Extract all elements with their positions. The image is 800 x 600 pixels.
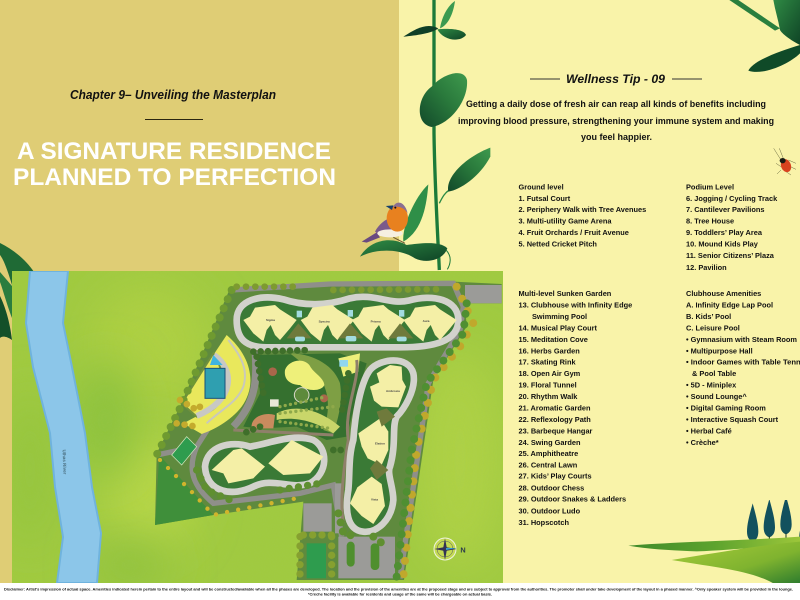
icon: ladybug [774,148,796,175]
list: clubhouse amenities: B. Kids’ Pool [686,312,731,321]
wellness tip paragraph: improving blood pressure, strengthening your immune system and making [458,115,774,126]
back hill [628,537,800,551]
list: podium level: 12. Pavilion [686,263,727,272]
lap pool [205,368,225,398]
top leaves [403,1,466,40]
list: podium level: 8. Tree House [686,216,734,226]
front hill [672,542,800,583]
list: multi-level sunken garden: 16. Herbs Garden [518,346,580,356]
central lawn [285,361,324,390]
background: left gold panel [0,0,399,583]
top right branch and leaves [729,0,800,72]
central road [233,347,256,427]
list: ground level: Ground level [518,182,564,192]
tower names: Aura [423,319,430,323]
list: multi-level sunken garden: Swimming Pool [532,312,587,321]
list: clubhouse amenities: • Crèche* [686,438,719,447]
green triangle lawn [155,455,213,525]
list: clubhouse amenities: & Pool Table [692,369,736,378]
list: multi-level sunken garden: 17. Skating Rink [518,358,576,366]
list: podium level: 10. Mound Kids Play [686,240,759,248]
list: podium level: 7. Cantilever Pavilions [686,205,764,214]
list: multi-level sunken garden: 20. Rhythm Walk [518,392,578,401]
clubhouse plot [182,353,222,417]
wellness tip paragraph: you feel happier. [581,131,652,142]
kids pool [210,355,223,365]
amphitheatre [252,414,275,428]
background: white footer strip [0,583,800,600]
clubhouse [338,353,360,377]
list: multi-level sunken garden: 15. Meditation Cove [518,335,588,344]
central garden [243,353,367,440]
robin bird [362,203,408,243]
list: clubhouse amenities: • Gymnasium with Steam Room [686,335,797,344]
tower names: Spectra [319,319,330,323]
list: multi-level sunken garden: 23. Barbeque Hangar [518,426,593,436]
hills with trees [628,496,800,583]
list: clubhouse amenities: A. Infinity Edge Lap Pool [686,300,773,310]
right residential cluster [347,360,414,532]
list: multi-level sunken garden: 22. Reflexology Path [518,415,591,424]
list: multi-level sunken garden: 25. Amphitheatre [518,449,578,458]
disclaimer: *Crèche facility is available for residents and usage of the same will be chargeable on actual basis. [308,592,492,596]
list: multi-level sunken garden: 26. Central Lawn [518,460,578,470]
list: clubhouse amenities: Clubhouse Amenities [686,289,761,298]
list: multi-level sunken garden: 31. Hopscotch [518,518,570,527]
list: clubhouse amenities: • Herbal Café [686,426,732,436]
vine with leaves [360,0,490,270]
list: multi-level sunken garden: 14. Musical Play Court [518,324,597,332]
tower names: Prisma [371,319,381,323]
grass ground [10,271,505,590]
river: Ulhas River [62,449,67,475]
list: multi-level sunken garden: Multi-level Sunken Garden [518,289,612,298]
river [26,271,101,583]
list: podium level: Podium Level [686,182,734,192]
large middle leaf [420,73,467,127]
list: ground level: 3. Multi-utility Game Arena [518,216,612,226]
road [157,283,463,578]
right residential cluster: Ambrosia [386,389,400,393]
hedges [347,542,379,570]
right residential cluster: Vista [371,498,378,502]
list: clubhouse amenities: • Interactive Squash Court [686,415,779,424]
list: multi-level sunken garden: 24. Swing Garden [518,438,581,447]
tree trunks [768,533,786,538]
list: multi-level sunken garden: 28. Outdoor Chess [518,484,584,492]
title: PLANNED TO PERFECTION [13,164,336,191]
list: podium level [686,182,778,272]
futsal court [307,543,326,578]
tower names: Sigma [266,318,275,322]
list: ground level [518,182,646,248]
list: clubhouse amenities [686,289,800,447]
compass: N [460,546,466,555]
list: clubhouse amenities: • Indoor Games with Table Tennis [686,358,800,366]
branch leaf right [439,148,490,203]
cypress trees [747,500,800,540]
disclaimer [4,588,793,596]
list: multi-level sunken garden: 19. Floral Tunnel [518,380,577,390]
tower names [266,319,430,323]
brown tracks [233,348,359,523]
list: multi-level sunken garden: 30. Outdoor Ludo [518,506,581,516]
list: podium level: 6. Jogging / Cycling Track [686,194,778,203]
masterplan map [10,271,505,590]
wellness tip paragraph [458,98,774,142]
list: ground level: 5. Netted Cricket Pitch [518,240,597,248]
wellness tip paragraph: Getting a daily dose of fresh air can reap all kinds of benefits including [466,98,766,109]
parking areas [303,285,502,578]
perch leaf [360,240,447,261]
leaf behind bird [403,184,428,242]
list: ground level: 2. Periphery Walk with Tree Avenues [518,205,646,214]
site plan [155,282,502,580]
list: clubhouse amenities: • Digital Gaming Room [686,404,766,412]
tendril [446,250,450,269]
decorative palm leaves behind map [0,243,34,340]
yellow crescent [183,335,250,434]
list: multi-level sunken garden: 27. Kids’ Play Courts [518,472,592,480]
divider under chapter label [145,119,203,120]
pools [295,310,407,341]
list: clubhouse amenities: • Multipurpose Hall [686,346,753,356]
bottom left residential cluster [205,438,324,492]
arena [172,437,197,465]
vine stem [434,0,439,270]
list: multi-level sunken garden: 21. Aromatic Garden [518,404,591,412]
list: ground level: 1. Futsal Court [518,194,571,203]
list: clubhouse amenities: • Sound Lounge^ [686,392,747,401]
right residential cluster: Elation [375,441,385,445]
site base [155,282,502,580]
title: A SIGNATURE RESIDENCE [17,138,331,165]
top residential cluster [237,297,458,347]
disclaimer: Disclaimer: Artist's impression of actual space. Amenities indicated herein pertain to the entire layout and will be constructed/available when all the phases are developed. The location and the provision of the amenities are at the proposed stage and are subject to approval from the authorities. The promoter shall under take development of the layout in a phased manner. ^Only speaker system will be provided in the lounge. [4,588,793,592]
list: clubhouse amenities: • 5D - Miniplex [686,380,737,390]
landscaped triangles [287,323,413,338]
list: multi-level sunken garden: 18. Open Air Gym [518,369,581,378]
clubhouse ring [197,355,228,416]
heading: chapter label: Chapter 9– Unveiling the Masterplan [70,88,276,102]
jogging path [207,340,245,423]
list: ground level: 4. Fruit Orchards / Fruit Avenue [518,228,629,237]
list: podium level: 11. Senior Citizens’ Plaza [686,251,775,260]
list: multi-level sunken garden: 29. Outdoor Snakes & Ladders [518,494,626,504]
compass [434,538,466,560]
list: multi-level sunken garden: 13. Clubhouse with Infinity Edge [518,300,632,310]
list: multi-level sunken garden [518,289,632,527]
list: podium level: 9. Toddlers’ Play Area [686,228,763,237]
title [13,138,336,191]
wellness tip heading: Wellness Tip - 09 [566,72,665,86]
list: clubhouse amenities: C. Leisure Pool [686,324,740,332]
tree rows [157,287,473,578]
